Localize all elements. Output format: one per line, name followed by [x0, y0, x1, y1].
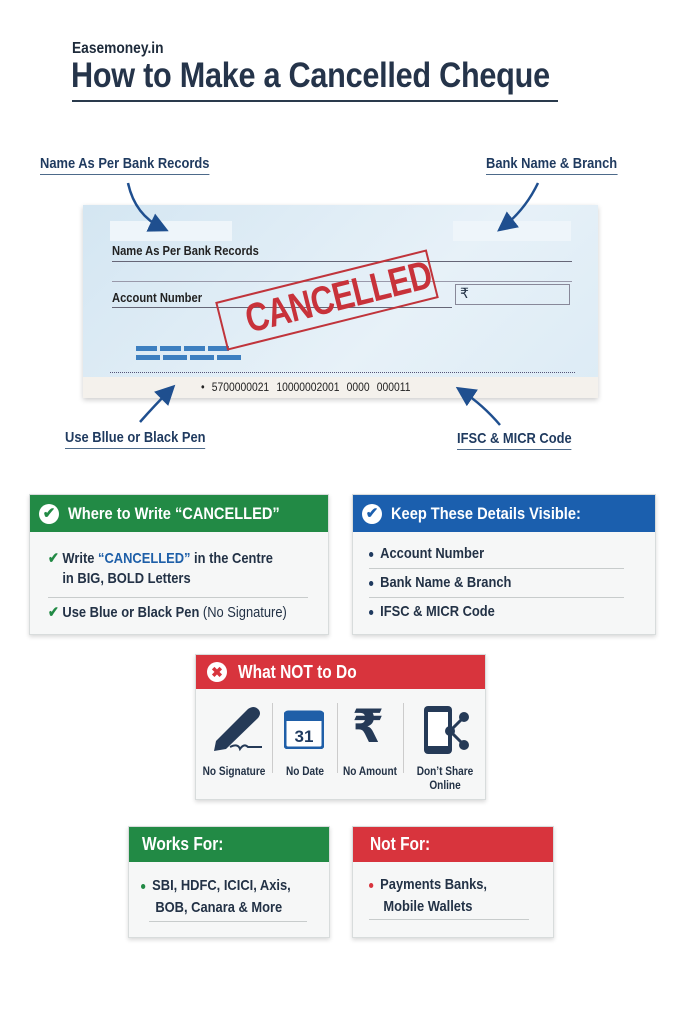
- panel: keep visible: Keep These Details Visible:: [391, 504, 581, 523]
- panel: what not to do: What NOT to Do: [238, 662, 357, 682]
- panel: not for: Not For:: [370, 834, 430, 854]
- panel: keep visible: ✔: [366, 505, 378, 522]
- panel: works for: BOB, Canara & More: [155, 899, 282, 916]
- panel: not for: Mobile Wallets: [383, 898, 472, 915]
- panel: keep visible: Bank Name & Branch: [380, 574, 511, 591]
- panel: where to write: ✔: [43, 505, 55, 522]
- panel: where to write: Where to Write “CANCELLED”: [68, 504, 280, 523]
- label: pen: Use Bllue or Black Pen: [65, 429, 206, 446]
- panel: works for: SBI, HDFC, ICICI, Axis,: [152, 877, 291, 894]
- icon: pen: [214, 707, 262, 752]
- panel: works for: [128, 826, 330, 938]
- label: bank: Bank Name & Branch: [486, 155, 617, 172]
- panel: keep visible: [352, 494, 656, 635]
- arrows: [126, 182, 540, 426]
- panel: where to write: in BIG, BOLD Letters: [62, 570, 191, 587]
- panel: what not to do: [195, 654, 486, 800]
- brand: Easemoney.in: [72, 40, 164, 57]
- panel: where to write: ✔ Use Blue or Black Pen (No Signature): [48, 604, 287, 621]
- cheque: [83, 205, 598, 398]
- panel: what not to do: No Date: [286, 764, 324, 778]
- panel: where to write: [29, 494, 329, 635]
- account number: Account Number: [112, 290, 202, 305]
- label: ifsc: IFSC & MICR Code: [457, 430, 572, 447]
- panel: what not to do: No Amount: [343, 764, 397, 778]
- panel: what not to do: Online: [429, 778, 461, 792]
- panel: where to write: ✔ Write “CANCELLED” in the Centre: [48, 550, 273, 567]
- icon labels: No Signature: [203, 764, 265, 778]
- panel: not for: Payments Banks,: [380, 876, 487, 893]
- stamp: CANCELLED: [241, 253, 436, 341]
- panel: what not to do: Don’t Share: [417, 764, 473, 778]
- icon: calendar: 31: [295, 727, 313, 746]
- title: How to Make a Cancelled Cheque: [71, 56, 550, 95]
- label: name: Name As Per Bank Records: [40, 155, 209, 172]
- panel: not for: [352, 826, 554, 938]
- panel: works for: Works For:: [142, 834, 223, 854]
- panel: keep visible: Account Number: [380, 545, 484, 562]
- icon: phone share: [424, 706, 469, 754]
- micr: • 5700000021 10000002001 0000 000011: [201, 380, 410, 394]
- icon: calendar: [284, 710, 324, 749]
- panel: what not to do: ✖: [211, 664, 223, 680]
- amount box: [455, 284, 570, 305]
- amount box: ₹: [460, 285, 469, 301]
- cheque name field: Name As Per Bank Records: [112, 243, 259, 258]
- icon: rupee: ₹: [352, 699, 384, 753]
- panel: keep visible: IFSC & MICR Code: [380, 603, 495, 620]
